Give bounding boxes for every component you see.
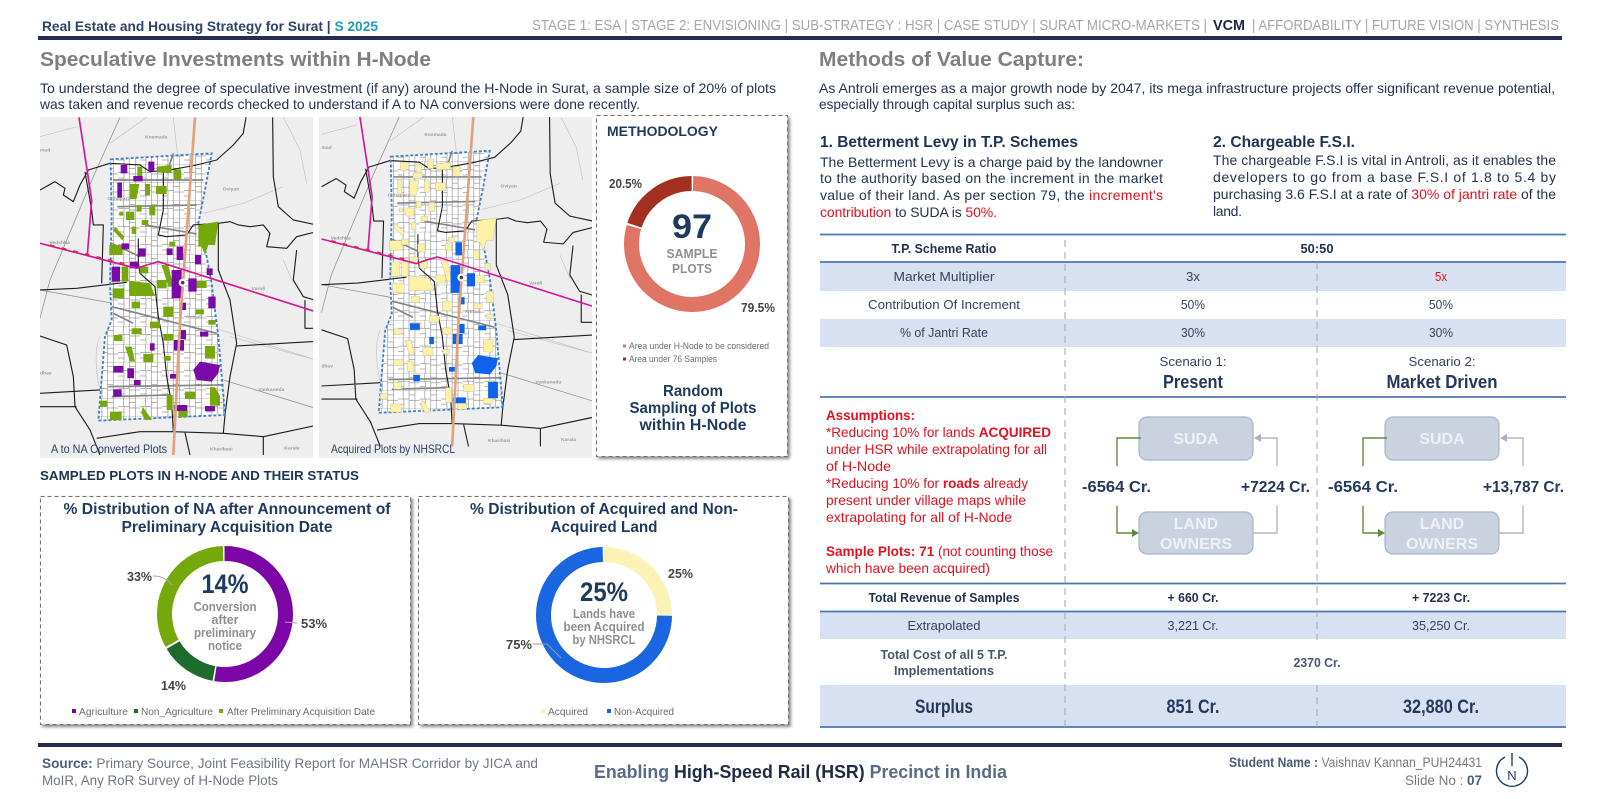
table rows: parameters: 3x [1186,269,1201,284]
flow diagram: scenario 2 [1328,417,1564,554]
chart title: % Distribution of NA after Announcement of [64,501,391,518]
flow diagram: scenario 2: LAND [1420,516,1464,533]
header: stage navigation: STAGE 1: ESA | STAGE 2: ENVISIONING | SUB-STRATEGY : HSR | CASE STUDY | SURAT MICRO-MARKETS | [532,17,1207,34]
flow diagram: scenario 2: SUDA [1419,431,1465,448]
legend: Acquired [548,706,588,718]
icon: north arrow [1496,753,1527,786]
donut centre text: notice [208,638,242,653]
donut labels: 33% [127,569,152,584]
table rows: results: Implementations [894,663,994,678]
donut labels: 14% [161,678,186,693]
text block: betterment levy: value of their land. As per section 79, the increment's [820,187,1163,203]
legend [541,706,674,718]
text block: betterment levy: The Betterment Levy is a charge paid by the landowner [820,154,1163,170]
legend [72,706,375,718]
table rows: results: 35,250 Cr. [1412,618,1470,633]
footer: student name and slide number: Slide No : 07 [1405,773,1482,788]
donut centre text: after [212,612,238,627]
donut labels [127,569,327,693]
chart title [64,501,391,536]
table rows: parameters: 30% [1181,325,1205,340]
donut centre text [194,569,257,653]
table rows: results: + 660 Cr. [1168,590,1218,605]
donut labels: 75% [506,637,532,652]
donut centre text: by NHSRCL [572,632,636,647]
methodology heading: METHODOLOGY [607,123,719,139]
text block: chargeable FSI: developers to go from a base F.S.I of 1.8 to 5.4 by [1213,169,1556,185]
donut labels: 25% [668,566,693,581]
scenario headings: Market Driven [1386,372,1498,392]
table rows: parameters: T.P. Scheme Ratio [892,241,997,256]
donut centre text: preliminary [194,625,257,640]
flow diagram: scenario 1: +7224 Cr. [1241,479,1310,496]
donut labels [506,566,693,652]
assumptions text: *Reducing 10% for lands ACQUIRED [826,424,1051,440]
map: acquired plots by NHSRCL: Acquired Plots by NHSRCL [331,442,455,456]
text block: betterment levy: contribution to SUDA is 50%. [820,204,997,220]
footer: student name and slide number: Student Name : Vaishnav Kannan_PUH24431 [1229,755,1482,770]
footer rule [38,743,1562,747]
panel: methodology [596,116,788,456]
assumptions text: under HSR while extrapolating for all [826,441,1047,457]
text block: betterment levy: to the authority based on the increment in the market [820,170,1163,186]
header: stage navigation: | AFFORDABILITY | FUTURE VISION | SYNTHESIS [1252,17,1559,34]
intro text: speculative investments: was taken and revenue records checked to understand if A to NA conversions were done recently. [39,96,640,112]
donut chart: acquired land [533,554,664,676]
assumptions text: which have been acquired) [825,560,990,576]
donut centre text: 14% [202,569,248,599]
flow diagram: scenario 2: -6564 Cr. [1328,479,1398,496]
intro text: value capture: especially through capital surplus such as: [819,96,1075,112]
footer: source: Source: Primary Source, Joint Feasibility Report for MAHSR Corridor by JICA and [42,755,538,771]
assumptions text: Assumptions: [826,407,915,423]
donut centre value: 97 [672,208,712,246]
text block: chargeable FSI: The chargeable F.S.I is vital in Antroli, as it enables the [1213,152,1556,168]
legend: Non_Agriculture [141,706,213,718]
map: A to NA converted plots: A to NA Converted Plots [51,442,167,456]
table rows: results: Surplus [915,697,973,718]
scenario headings: Scenario 1: [1160,354,1226,369]
heading: speculative investments: Speculative Investments within H-Node [40,49,431,71]
scenario headings [1160,354,1498,392]
scenario headings: Present [1163,372,1223,392]
header: stage navigation: VCM [1213,17,1245,34]
legend: Non-Acquired [614,706,674,718]
donut labels: 79.5% [741,300,775,315]
flow diagram: scenario 1: LAND [1174,516,1218,533]
methodology caption: Sampling of Plots [630,400,757,417]
chart title: Preliminary Acquisition Date [122,519,333,536]
methodology caption: within H-Node [639,417,747,434]
methodology caption: Random [663,383,723,400]
footer: tagline: Enabling High-Speed Rail (HSR) Precinct in India [594,762,1008,782]
legend: After Preliminary Acquisition Date [227,706,375,718]
table rows: parameters [868,241,1453,340]
chart title: Acquired Land [550,519,658,536]
footer: source [42,755,538,788]
heading: sampled plots: SAMPLED PLOTS IN H-NODE AND THEIR STATUS [40,468,359,483]
donut legend: Area under 76 Samples [629,354,717,365]
donut centre text: 25% [580,577,628,607]
assumptions text: Sample Plots: 71 (not counting those [826,543,1053,559]
intro text: speculative investments: To understand the degree of speculative investment (if any) around the H-Node in Surat, a sample size of 20% of plots [40,80,776,96]
table rows: parameters: 30% [1429,325,1453,340]
chart title [470,501,738,536]
donut labels: 20.5% [609,176,642,191]
table rows: parameters: 50:50 [1300,241,1334,256]
donut chart: sample plots [630,182,754,306]
table rows: results: 2370 Cr. [1294,655,1340,670]
assumptions text: present under village maps while [826,492,1026,508]
donut centre text: been Acquired [564,619,645,634]
flow diagram: scenario 2: +13,787 Cr. [1483,479,1564,496]
header rule [38,36,1562,40]
map: acquired plots by NHSRCL [319,117,592,458]
donut chart: NA distribution [153,554,297,674]
donut centre text: Conversion [194,599,257,614]
table rows: parameters: Market Multiplier [894,269,995,284]
assumptions text [825,407,1053,576]
text block: chargeable FSI [1213,134,1556,219]
scenario headings: Scenario 2: [1408,354,1476,369]
assumptions text: extrapolating for all of H-Node [826,509,1012,525]
methodology caption [630,383,757,434]
table rows: results: 851 Cr. [1166,697,1220,718]
text block: chargeable FSI: 2. Chargeable F.S.I. [1213,134,1355,151]
table rows: results: + 7223 Cr. [1412,590,1470,605]
donut centre text [564,577,645,647]
table rows: results: Total Cost of all 5 T.P. [880,647,1008,662]
panel: distribution of acquired land [418,496,788,724]
text block: betterment levy: 1. Betterment Levy in T.P. Schemes [820,134,1078,151]
table rows: parameters: Contribution Of Increment [868,297,1020,312]
map: A to NA converted plots [40,117,313,458]
chart title: % Distribution of Acquired and Non- [470,501,738,518]
icon: north arrow: N [1507,768,1517,783]
table: T.P. scheme scenarios [820,234,1566,727]
flow diagram: scenario 1: OWNERS [1160,536,1232,553]
donut centre value: SAMPLE [666,246,718,261]
heading: methods of value capture: Methods of Value Capture: [819,49,1084,71]
flow diagram: scenario 1: SUDA [1173,431,1219,448]
assumptions text: *Reducing 10% for roads already [826,475,1028,491]
flow diagram: scenario 1 [1082,417,1310,554]
flow diagram: scenario 1: -6564 Cr. [1082,479,1151,496]
table rows: results: 3,221 Cr. [1168,618,1218,633]
donut centre text: Lands have [573,606,635,621]
intro text: speculative investments [39,80,776,112]
panel: distribution of NA [40,496,410,724]
table rows: parameters: % of Jantri Rate [900,325,988,340]
donut centre value: PLOTS [672,261,712,276]
donut legend: Area under H-Node to be considered [629,341,769,352]
assumptions text: of H-Node [826,458,891,474]
table rows: results [868,590,1479,718]
intro text: value capture [819,80,1555,112]
header: project title: Real Estate and Housing Strategy for Surat | S 2025 [42,18,378,34]
table rows: results: 32,880 Cr. [1403,697,1479,718]
donut labels: 53% [301,616,327,631]
text block: chargeable FSI: purchasing 3.6 F.S.I at a rate of 30% of jantri rate of the [1213,186,1556,202]
flow diagram: scenario 2: OWNERS [1406,536,1478,553]
table rows: parameters: 50% [1429,297,1453,312]
donut legend [623,341,769,365]
text block: betterment levy [820,134,1163,220]
donut labels [609,176,775,315]
legend: Agriculture [79,706,128,718]
donut centre value [666,208,718,276]
table rows: parameters: 50% [1181,297,1205,312]
intro text: value capture: As Antroli emerges as a major growth node by 2047, its mega infrastructure projects offer significant revenue potential, [819,80,1555,96]
table rows: results: Extrapolated [908,618,980,633]
table rows: results: Total Revenue of Samples [868,590,1020,605]
footer: student name and slide number [1229,755,1482,788]
table rows: parameters: 5x [1435,269,1447,284]
footer: source: MoIR, Any RoR Survey of H-Node Plots [42,772,278,788]
text block: chargeable FSI: land. [1213,203,1242,219]
